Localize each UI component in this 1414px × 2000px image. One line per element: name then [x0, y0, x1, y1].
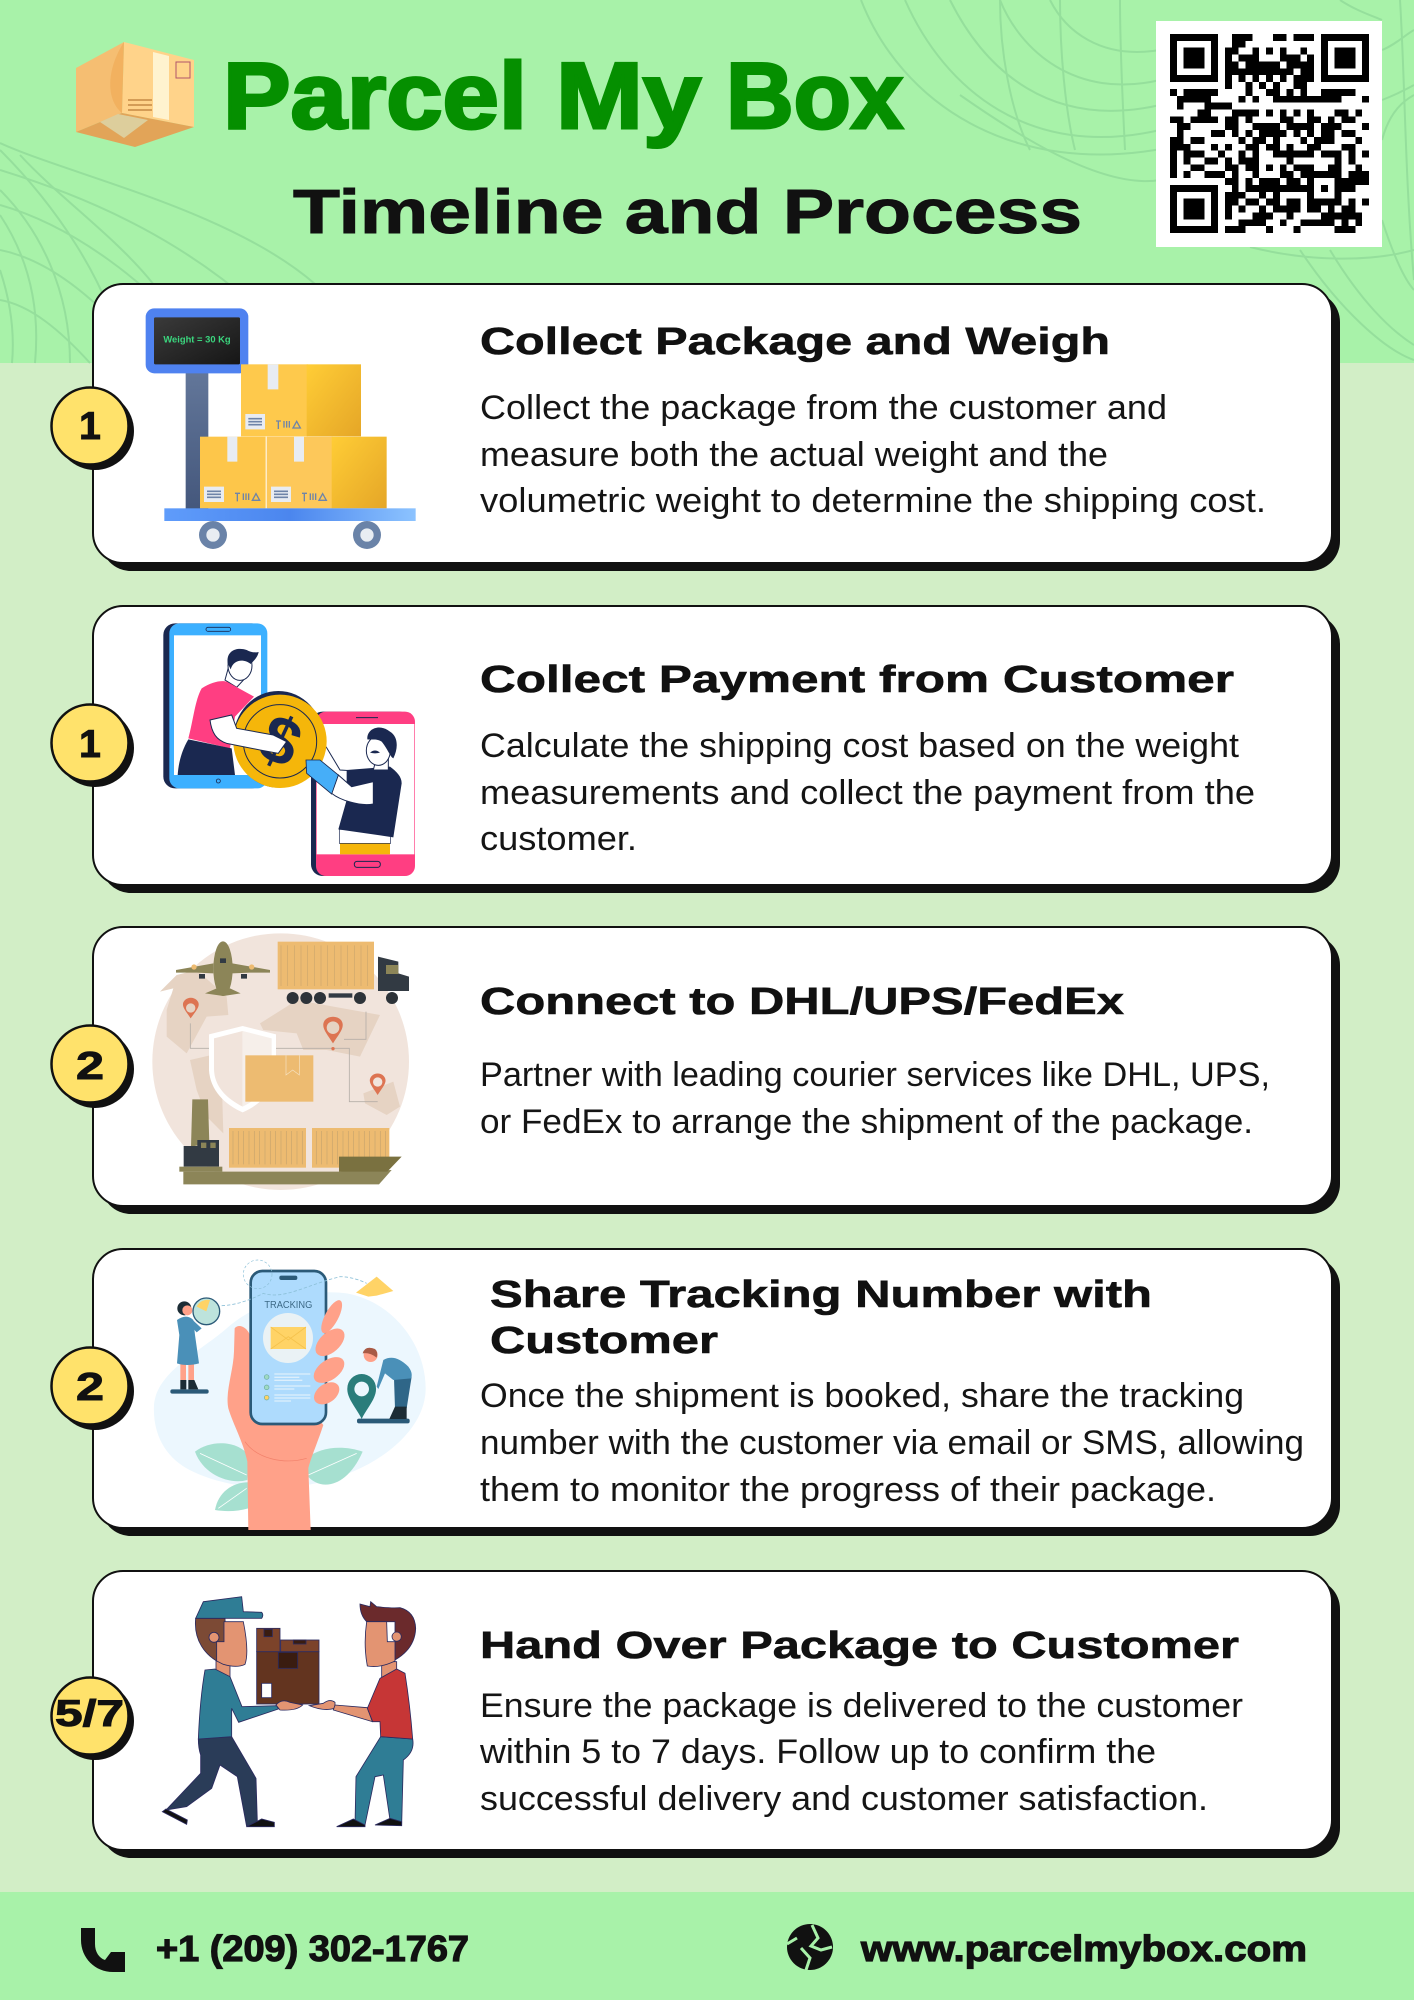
panel: step 3 connect to couriers	[52, 927, 1340, 1214]
illustration: phone tracking	[154, 1260, 426, 1530]
body text: Partner with leading courier services like DHL, UPS,	[480, 1056, 1270, 1094]
badge: 1: 1	[79, 723, 101, 766]
body text: Collect the package from the customer and	[480, 389, 1167, 427]
QR code	[1156, 21, 1382, 247]
badge: 1	[52, 388, 134, 470]
badge: 2	[52, 1026, 134, 1108]
body text: measurements and collect the payment from the	[480, 774, 1255, 812]
footer phone number: +1 (209) 302-1767	[156, 1928, 469, 1969]
illustration: payment between phones: $	[248, 700, 312, 783]
heading: Customer	[490, 1320, 718, 1362]
body text: Ensure the package is delivered to the customer	[480, 1687, 1243, 1725]
illustration: global shipping	[152, 933, 409, 1190]
body text: Calculate the shipping cost based on the weight	[480, 727, 1240, 765]
heading: Hand Over Package to Customer	[480, 1625, 1239, 1667]
body text: or FedEx to arrange the shipment of the package.	[480, 1103, 1253, 1141]
background mesh curves	[0, 0, 1414, 363]
body text	[479, 1687, 1243, 1818]
body text	[480, 389, 1266, 520]
heading: Collect Package and Weigh	[480, 321, 1110, 363]
title: My	[556, 43, 701, 148]
illustration: payment between phones	[163, 623, 415, 876]
title	[223, 43, 903, 148]
body text: successful delivery and customer satisfaction.	[480, 1780, 1208, 1818]
illustration: parcel scale	[146, 308, 416, 549]
body text: number with the customer via email or SMS, allowing	[480, 1424, 1304, 1462]
footer website: www.parcelmybox.com	[860, 1928, 1307, 1969]
panel: step 4 share tracking	[52, 1249, 1340, 1536]
icon: globe	[787, 1924, 833, 1970]
panel: step 1 collect package and weigh	[52, 284, 1340, 571]
body text	[480, 1377, 1304, 1509]
badge: 2: 2	[76, 1366, 104, 1409]
badge: 5/7: 5/7	[55, 1693, 124, 1734]
badge: 1: 1	[79, 405, 101, 448]
heading	[490, 1274, 1152, 1362]
body text: within 5 to 7 days. Follow up to confirm the	[479, 1733, 1156, 1771]
badge: 1	[52, 704, 134, 787]
illustration: package handover	[162, 1597, 416, 1827]
title: Box	[726, 43, 903, 148]
badge: 2: 2	[76, 1045, 104, 1088]
badge: 5/7	[52, 1678, 134, 1760]
panel: step 2 collect payment	[52, 606, 1340, 893]
icon: cardboard box logo	[76, 42, 194, 147]
body text: customer.	[480, 820, 637, 858]
body text: Once the shipment is booked, share the tracking	[480, 1377, 1244, 1415]
panel: step 5 hand over package	[52, 1571, 1340, 1858]
title: Parcel	[223, 43, 527, 148]
illustration: phone tracking: TRACKING	[264, 1300, 312, 1311]
body text: volumetric weight to determine the shipping cost.	[480, 482, 1266, 520]
badge: 2	[52, 1348, 134, 1430]
heading: Connect to DHL/UPS/FedEx	[480, 981, 1124, 1023]
body text	[480, 727, 1255, 858]
subtitle: Timeline and Process	[293, 178, 1082, 247]
heading: Collect Payment from Customer	[480, 659, 1234, 701]
heading: Share Tracking Number with	[490, 1274, 1152, 1316]
body text: measure both the actual weight and the	[480, 436, 1108, 474]
body text	[480, 1056, 1270, 1141]
icon: phone	[81, 1928, 125, 1972]
body text: them to monitor the progress of their package.	[480, 1471, 1216, 1509]
illustration: parcel scale: Weight = 30 Kg	[163, 335, 231, 345]
